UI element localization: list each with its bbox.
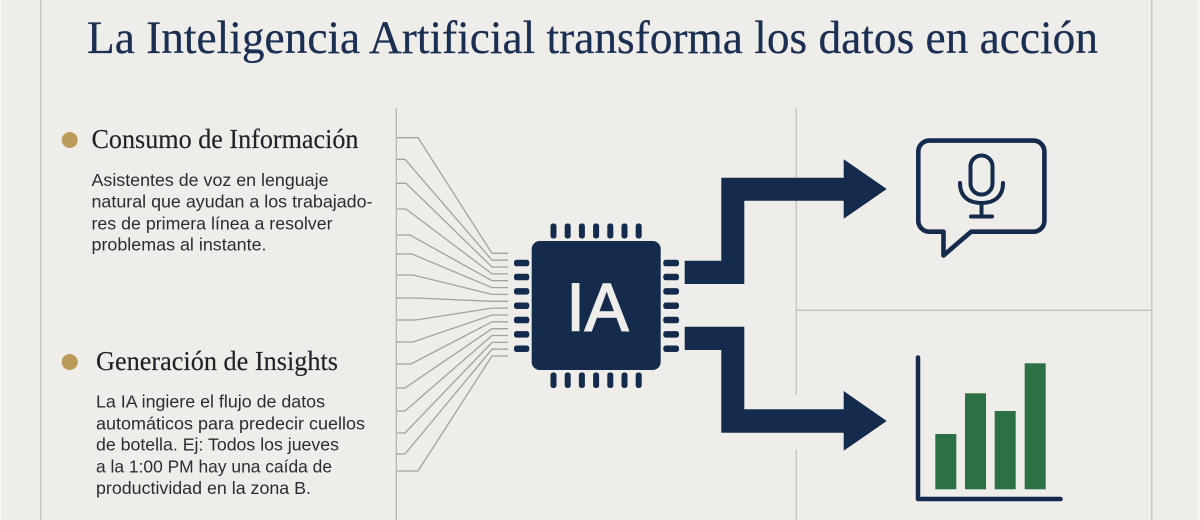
text block: generación de insights: a la 1:00 PM hay una caída de — [96, 456, 332, 476]
text block: generación de insights: de botella. Ej: Todos los jueves — [96, 435, 339, 455]
text block: consumo de información: problemas al instante. — [92, 235, 266, 255]
data lines converging on the chip — [396, 108, 508, 520]
text block: consumo de información: natural que ayudan a los trabajado- — [92, 192, 372, 212]
icon: IA chip — [514, 224, 679, 388]
text block: consumo de información — [92, 170, 372, 255]
bullet: consumo — [62, 132, 78, 148]
chart axes — [918, 358, 1060, 499]
text block: generación de insights: La IA ingiere el flujo de datos — [96, 391, 325, 411]
bar chart — [918, 358, 1060, 499]
bullet: insights — [62, 354, 78, 370]
icon: IA chip: IA — [566, 270, 629, 346]
arrow: chip to voice assistant — [685, 159, 887, 284]
chart bars — [935, 363, 1046, 489]
text block: generación de insights: automáticos para predecir cuellos — [96, 413, 365, 433]
heading: consumo de información: Consumo de Información — [92, 124, 359, 154]
text block: consumo de información: Asistentes de voz en lenguaje — [92, 170, 328, 190]
panel: generación de insights — [62, 346, 365, 498]
icon: speech bubble with microphone — [918, 141, 1044, 256]
text block: consumo de información: res de primera línea a resolver — [92, 213, 333, 233]
arrow: chip to chart — [685, 327, 887, 451]
panel: consumo de información — [62, 124, 372, 255]
text block: generación de insights — [96, 391, 365, 498]
heading: generación de insights: Generación de Insights — [96, 346, 338, 376]
title: La Inteligencia Artificial transforma los datos en acción — [87, 12, 1098, 64]
text block: generación de insights: productividad en la zona B. — [96, 478, 311, 498]
